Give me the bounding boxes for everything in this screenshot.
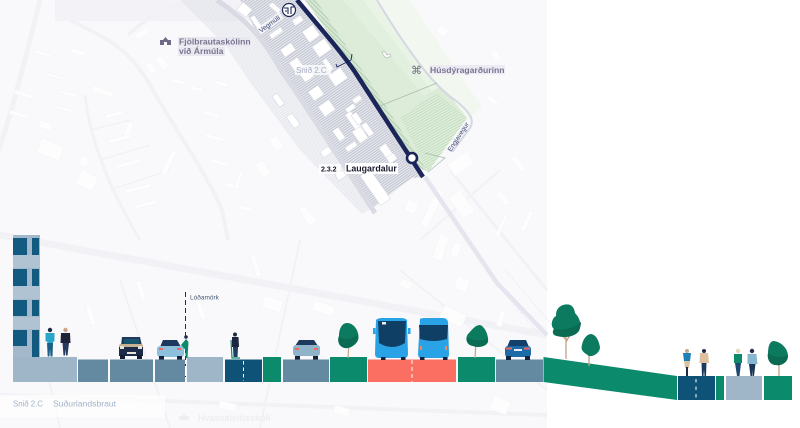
building [13, 235, 40, 357]
tree [338, 323, 359, 358]
background map [0, 0, 552, 428]
pedestrian, beige coat [700, 349, 709, 376]
label: Húsdýragarðurinn: Húsdýragarðurinn [430, 65, 504, 75]
hatched city block along Suðurlandsbraut [180, 0, 547, 335]
pedestrian, light blue top [748, 349, 758, 376]
faint map label: Hvassaleitisskóli: Hvassaleitisskóli [198, 413, 271, 423]
car front view, centre [293, 340, 320, 360]
street section ground [13, 357, 792, 400]
label: Engjavegur: Engjavegur [447, 121, 471, 153]
label: Fjölbrautaskólinn við Ármúla: við Ármúla [179, 46, 224, 56]
pedestrian, dark jacket [60, 328, 70, 356]
section marker: Snið 2.C: Snið 2.C [296, 66, 327, 75]
icon: junction Vegmúli [282, 4, 296, 16]
label: 2.3.2 Laugardalur [319, 163, 398, 174]
pedestrian, blue shirt [46, 328, 54, 356]
tree, large on slope [552, 304, 581, 359]
label: Fjölbrautaskólinn við Ármúla: Fjölbrautaskólinn [179, 36, 251, 46]
tree, small on slope [582, 334, 600, 366]
car front view [157, 340, 184, 360]
scooter rider at property line [181, 335, 188, 358]
scooter rider [231, 332, 240, 358]
tree, right [768, 341, 788, 376]
label: 2.3.2 Laugardalur: Laugardalur [346, 164, 397, 174]
icon: school [160, 37, 171, 45]
route line: Suðurlandsbraut [297, 0, 423, 177]
bus front [373, 318, 410, 360]
label: Fjölbrautaskólinn við Ármúla [178, 36, 251, 56]
section caption: Snið 2.C [13, 400, 43, 408]
label: Vegmúli: Vegmúli [258, 14, 282, 35]
pedestrian, green top [734, 349, 742, 376]
section marker: Snið 2.C [295, 54, 352, 75]
property line: Lóðamörk [186, 292, 220, 382]
section caption [0, 395, 165, 417]
station marker: Laugardalur [407, 153, 417, 163]
section caption: Suðurlandsbraut [53, 398, 117, 408]
label: 2.3.2 Laugardalur: 2.3.2 [321, 166, 337, 174]
tree [466, 325, 488, 358]
park area: Húsdýragarðurinn [305, 0, 482, 172]
bus rear [418, 318, 449, 360]
SUV front view [119, 337, 143, 359]
cyclist [683, 349, 691, 376]
car rear view [505, 340, 531, 360]
label: Húsdýragarðurinn [411, 65, 505, 77]
property line: Lóðamörk: Lóðamörk [190, 294, 220, 302]
label: Húsdýragarðurinn: ⌘ [411, 65, 422, 77]
